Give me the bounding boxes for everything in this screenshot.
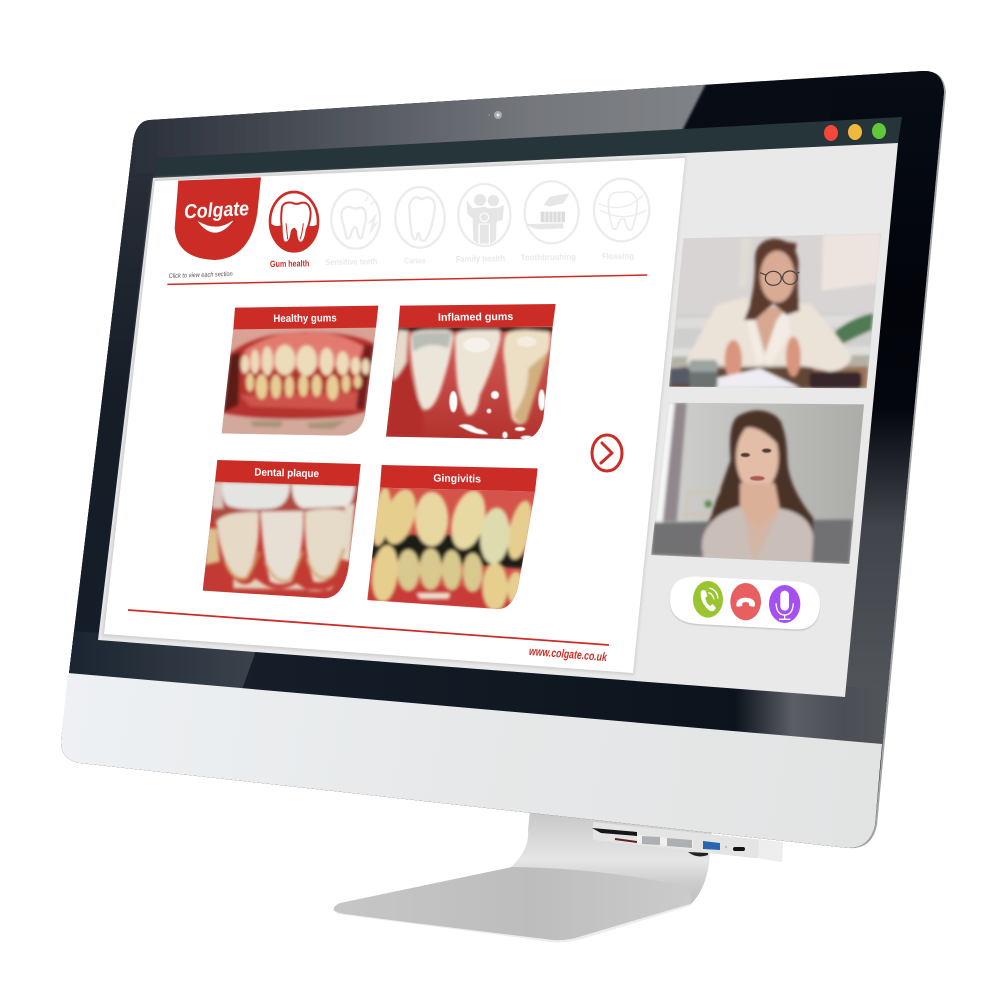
Colgate logo: Colgate [184,198,250,223]
icon: caries [395,187,445,248]
button: end call [730,583,761,620]
header rule [167,275,647,284]
USB-C port [733,847,745,851]
stand neck [510,810,712,905]
indicator [725,846,727,848]
label: flossing: Flossing [602,251,634,261]
lower bezel left reflection [69,632,256,688]
footer rule [128,610,609,645]
photo: healthy gums [220,327,380,440]
lower bezel right reflection [740,689,797,736]
label: toothbrushing: Toothbrushing [521,252,576,262]
card: healthy gums [220,306,380,440]
title: healthy gums: Healthy gums [273,312,337,325]
label: family health: Family health [456,253,505,264]
photo: gingivitis [367,485,537,611]
icon: flossing [594,179,649,241]
label: caries: Caries [404,255,426,265]
controls pill [670,577,820,629]
title: inflamed gums: Inflamed gums [438,311,513,324]
label: gum health: Gum health [270,258,309,269]
button: microphone [769,585,800,623]
right bezel shading [834,71,944,760]
banner: inflamed gums [398,304,556,328]
webcam [488,111,502,119]
USB port [703,841,720,850]
clamp shadow [688,852,708,856]
website link: www.colgate.co.uk [529,644,608,664]
window buttons [824,123,886,141]
video: presenter [667,232,883,392]
hint text: Click to view each section [169,271,233,280]
next arrow button [592,435,622,471]
photo: dental plaque [200,480,360,600]
screen title bar [153,117,902,178]
slide panel [102,156,686,675]
icon: family health [458,184,510,246]
monitor chin [61,673,882,848]
icon: gum health [270,192,318,251]
card: gingivitis [367,465,538,611]
call controls [670,577,820,631]
banner: gingivitis [380,465,538,492]
button: call [693,581,723,618]
slide sheet [104,158,685,673]
slide header [167,177,649,284]
screen background [98,143,898,697]
presenter glasses [760,271,799,285]
Colgate logo [175,177,261,260]
title: dental plaque: Dental plaque [254,467,319,480]
icon: sensitive teeth [331,189,380,249]
lower bezel dark band [69,632,699,728]
card: inflamed gums [385,304,556,442]
card slot [592,828,637,836]
video call panel [650,232,883,631]
label: sensitive teeth: Sensitive teeth [325,256,377,267]
metal ports [637,835,693,849]
micro card slot [615,839,637,842]
video: patient [650,402,867,565]
photo: inflamed gums [385,327,555,442]
banner: healthy gums [233,306,378,329]
USB hub [592,822,783,862]
patient facial features [741,449,771,481]
stand foot [334,867,692,942]
monitor silver edge [61,71,946,848]
controls shadow [670,578,820,631]
icon: toothbrushing [525,181,579,243]
card: dental plaque [200,460,361,600]
infographic: monitor mockup [60,71,946,942]
title: gingivitis: Gingivitis [433,472,481,485]
hub clamp [758,840,783,862]
tooth photo cards [200,304,556,611]
hub body [593,822,783,862]
left bezel shading [69,120,154,672]
stand [334,810,712,942]
slide shadow [102,156,686,675]
banner: dental plaque [215,460,361,486]
monitor bezel [50,60,950,860]
top glass reflection [129,84,708,174]
